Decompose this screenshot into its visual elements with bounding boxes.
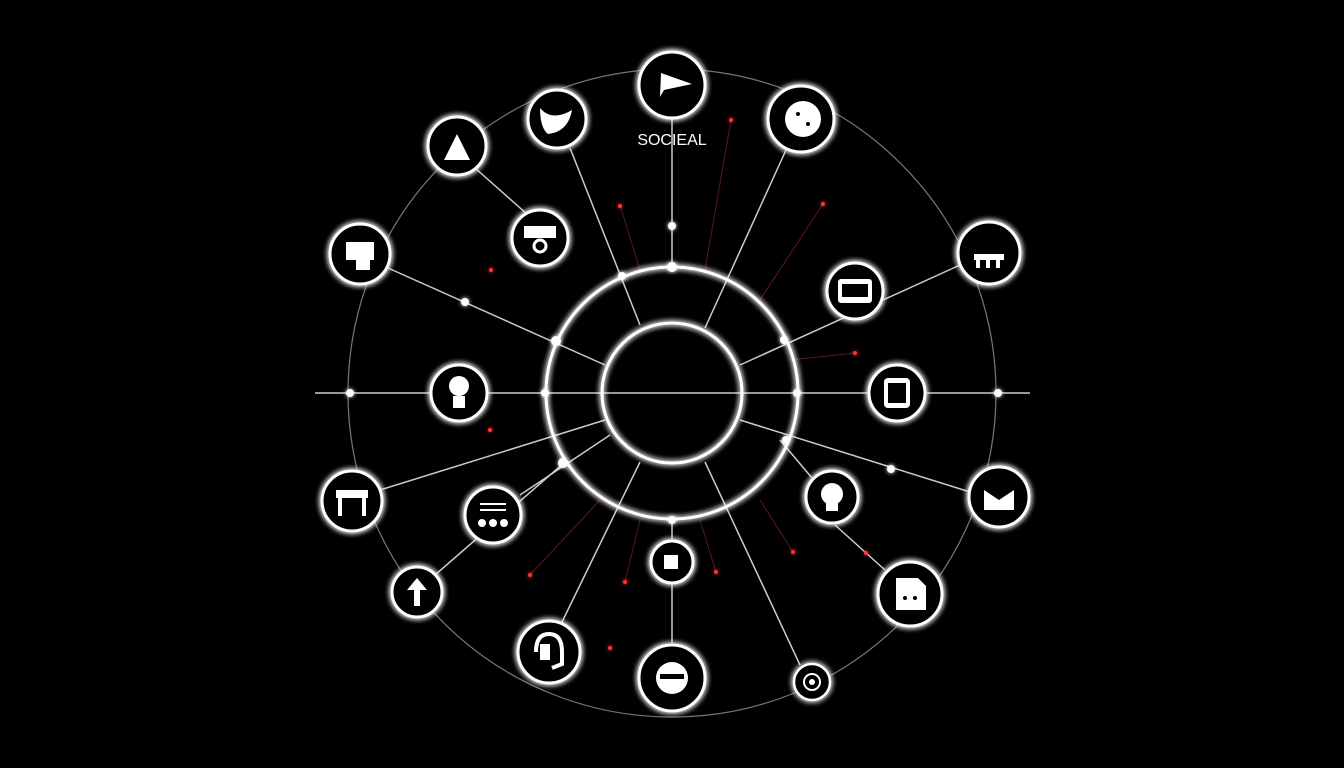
node: shop xyxy=(958,222,1020,284)
node: send xyxy=(639,52,705,118)
outer orbit xyxy=(348,69,996,717)
title text: SOCIEAL xyxy=(637,132,707,149)
node: document xyxy=(878,562,942,626)
icon nodes xyxy=(322,52,1029,711)
node: list xyxy=(465,487,521,543)
node: tent xyxy=(428,117,486,175)
node: twitter xyxy=(528,90,586,148)
connector lines xyxy=(315,118,1030,665)
node: arrow xyxy=(392,567,442,617)
node: face xyxy=(806,471,858,523)
node: headset xyxy=(518,621,580,683)
node: window xyxy=(827,263,883,319)
nodes dots xyxy=(346,222,1002,524)
node: mail xyxy=(969,467,1029,527)
node: ring xyxy=(512,210,568,266)
rings xyxy=(546,267,798,519)
node: at xyxy=(794,664,830,700)
red sparks xyxy=(488,118,868,650)
node: avatar xyxy=(639,645,705,711)
node: globe xyxy=(768,86,834,152)
node: small xyxy=(651,541,693,583)
node: table xyxy=(322,471,382,531)
node: plant xyxy=(431,365,487,421)
node: monitor xyxy=(330,224,390,284)
faint red lines xyxy=(530,120,855,582)
node: phone xyxy=(869,365,925,421)
